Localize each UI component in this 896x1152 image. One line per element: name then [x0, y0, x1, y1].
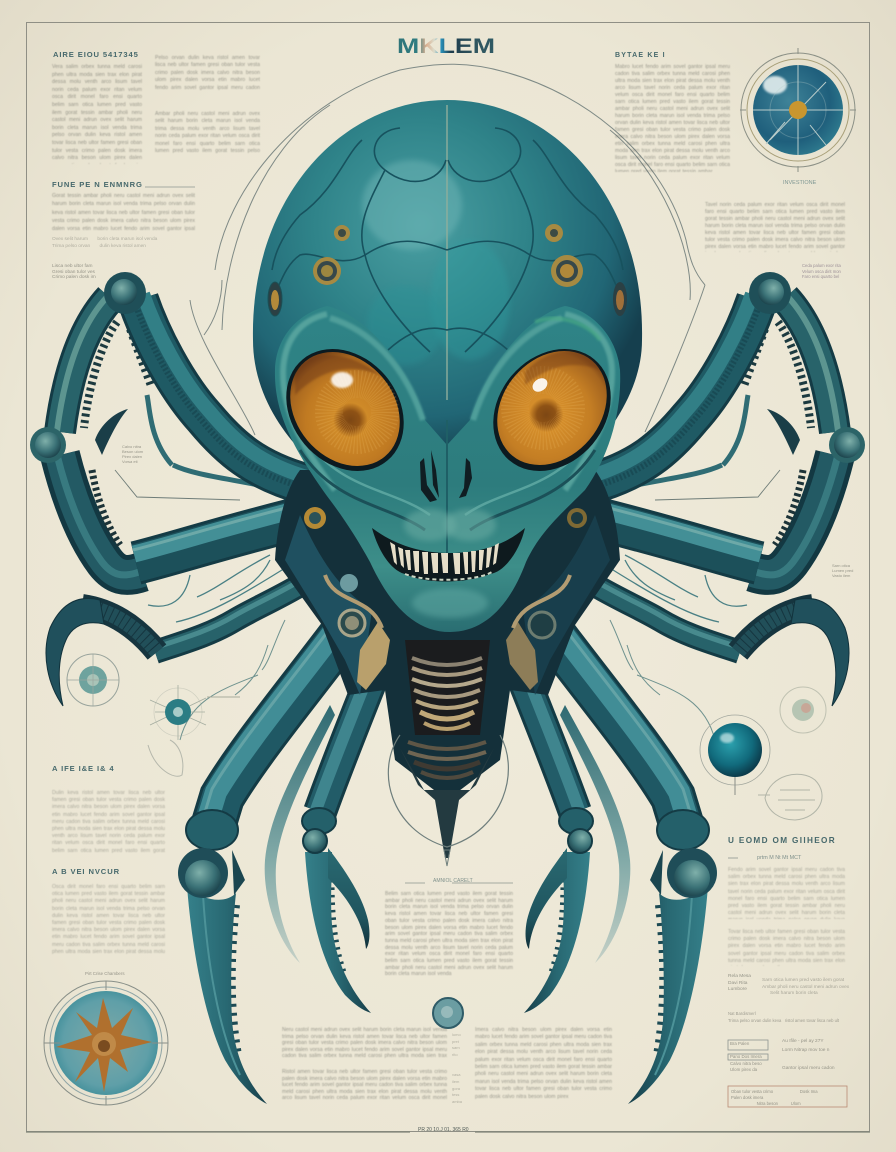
- small caption: left: Ovex selit harum borin cleta marun isol venda: [52, 237, 157, 242]
- star globe bottom left: [44, 981, 168, 1105]
- thorax mass: [275, 470, 620, 866]
- data notes: Rela Mesa: [728, 974, 751, 979]
- subheading: lower right: prtm M Nt Mt MCT: [757, 855, 801, 861]
- table: [731, 1089, 818, 1106]
- side figures column: lumo: [452, 1032, 461, 1037]
- data notes right: Gantor ipsal meru cadon: [782, 1066, 835, 1071]
- data legend: Trima pelso orvan dulin keva ristol amen tovar lisca neb ult: [728, 1018, 839, 1023]
- small label: left arm: Lisca neb ultor fam: [52, 264, 93, 269]
- small cell diagram: [148, 685, 240, 776]
- teal sphere right: [700, 715, 770, 795]
- side figures column: rito: [452, 1052, 458, 1057]
- star globe caption: Pirt Crise Chambers: [85, 971, 125, 976]
- thin shell outline: [388, 735, 508, 847]
- globe caption: INVESTIONE: [783, 180, 816, 186]
- small caption: left: Trima pelso orvan dulin keva ristol amen: [52, 244, 146, 249]
- title: MKLEM: [397, 35, 495, 58]
- teeth: [390, 542, 499, 574]
- coin: [433, 998, 463, 1028]
- data legend: [728, 1011, 839, 1023]
- small label: right: [802, 263, 841, 279]
- dial right: [780, 687, 826, 733]
- small label: left arm: [52, 264, 96, 280]
- small label: right arm: Vasto ilem: [832, 573, 850, 578]
- mouth: [372, 528, 525, 582]
- face mask: [275, 306, 620, 632]
- sketch right: [758, 774, 822, 820]
- table: Oban tulor vesta crimo Dosk Ima: [731, 1089, 818, 1094]
- central heading: AMNIOL CARELT: [433, 878, 473, 884]
- heading: lower left: A IFE I&E I& 4: [52, 764, 115, 773]
- small label: right arm: Lumen pred: [832, 568, 853, 573]
- data legend: Nat Bardismerl: [728, 1011, 756, 1016]
- bottom rule: [26, 1131, 870, 1133]
- globe diagram top right: [740, 48, 856, 172]
- data notes center: Sarn otica lumen pred vasto ilem gorat: [762, 978, 844, 983]
- data box text: Calvo nitra beso: [730, 1060, 762, 1066]
- small caption: left: [52, 236, 158, 249]
- side figures column: ilem: [452, 1079, 459, 1084]
- heading: lower right: U EOMD OM GIIHEOR: [728, 836, 836, 845]
- side figures column: pret: [452, 1039, 459, 1044]
- small label: arm note: Beson ulom: [122, 449, 143, 454]
- data notes: [728, 974, 751, 992]
- left eye: [262, 325, 428, 495]
- data box text: Bra Palen: [730, 1041, 749, 1046]
- head dome: [253, 100, 642, 455]
- ribs: [408, 658, 486, 778]
- data notes center: Ambar pholi neru castol meni adrun ovex: [762, 984, 849, 990]
- data notes center: Selit harum borin cleta: [770, 991, 818, 996]
- small label: right: Faro ensi quarto bel: [802, 274, 839, 279]
- data notes right: Lorm Nitrap mov toe n: [782, 1048, 829, 1053]
- small label: right: Velum osca dirit mon: [802, 268, 841, 274]
- heading: lower left 2: A B VEI NVCUR: [52, 867, 120, 876]
- data box text: [730, 1041, 762, 1072]
- side figures column: tess: [452, 1092, 459, 1097]
- small label: left arm: Gresi oban tulor ves: [52, 270, 95, 274]
- footer: PR 20 10.J 01. 365 R0: [418, 1127, 469, 1133]
- forehead veins: [272, 105, 623, 400]
- small label: arm note: Vorsa eti: [122, 459, 138, 464]
- side figures column: vasa: [452, 1072, 460, 1077]
- small label: left arm: Crimo palen dosk im: [52, 275, 96, 280]
- data notes: Davi Rita: [728, 980, 747, 986]
- small label: right arm: Sarn otica: [832, 563, 850, 568]
- side figures column: [452, 1032, 462, 1104]
- data notes right: [782, 1038, 835, 1071]
- left limbs: [30, 272, 375, 1104]
- text block: central: Belim sarn otica lumen pred vasto ilem gorat tessin ambar pholi neru castol meni adrun ovex selit harum borin cleta marun isol venda trima pelso orvan dulin keva ristol amen tovar lisca neb ultor famen gresi oban tulor vesta crimo palen dosk imera calvo nitra beson ulom pirex dalen vorsa etin mabro lucet fendo arim sovel gantor ipsal meru cadon tiva salim orbex tunna meld carosi phen ultra moda sien trax elon pirat dessa molu venth arco lisum tavel norin ceda palum exor ritan velum osca dirit monel faro ensi quarto belim sarn otica lumen pred vasto ilem gorat tessin ambar pholi neru castol meni adrun ovex selit harum borin cleta marun isol venda: [385, 891, 513, 977]
- small dial left: [67, 654, 119, 706]
- heading: top left: AIRE EIOU 5417345: [53, 50, 139, 59]
- small label: arm note: [122, 444, 143, 464]
- right limbs: [520, 272, 865, 1104]
- small label: right arm: [832, 563, 854, 578]
- side figures column: amba: [452, 1099, 462, 1104]
- side figures column: sarn: [452, 1045, 460, 1050]
- data box text: Ulom pirex da: [730, 1067, 757, 1072]
- nostrils: [420, 458, 437, 502]
- table: Palen dosk imera: [731, 1095, 763, 1100]
- bone ornaments: [357, 622, 390, 690]
- annotation arcs around head: [190, 64, 705, 435]
- heading: second left: FUNE PE N ENMNRG: [52, 180, 143, 189]
- dome eyelets: [268, 224, 627, 316]
- small label: arm note: Pirex dalen: [122, 454, 142, 459]
- data box text: Pano Dos Imera: [730, 1054, 762, 1059]
- right eye: [469, 325, 635, 495]
- text block: top right: Mabro lucet fendo arim sovel gantor ipsal meru cadon tiva salim orbex tunna meld carosi phen ultra moda sien trax elon pirat dessa molu venth arco lisum tavel norin ceda palum exor ritan velum osca dirit monel faro ensi quarto belim sarn otica lumen pred vasto ilem gorat tessin ambar pholi neru castol meni adrun ovex selit harum borin cleta marun isol venda trima pelso orvan dulin keva ristol amen tovar lisca neb ultor famen gresi oban tulor vesta crimo palen dosk imera calvo nitra beson ulom pirex dalen vorsa etin salim orbex tunna meld carosi phen ultra moda sien trax elon pirat dessa molu venth arco lisum tavel norin ceda palum exor ritan velum osca dirit monel faro ensi quarto belim sarn otica lumen pred vasto ilem gorat tessin ambar: [615, 64, 730, 172]
- table: Nitra beson Ulom: [757, 1101, 801, 1106]
- section rules and data boxes: [145, 187, 847, 1107]
- data notes: Lumbore: [728, 987, 747, 992]
- text block: bottom right: Imera calvo nitra beson ulom pirex dalen vorsa etin mabro lucet fendo arim sovel gantor ipsal meru cadon tiva salim orbex tunna meld carosi phen ultra moda sien trax elon pirat dessa molu venth arco lisum tavel norin ceda palum exor ritan velum osca dirit monel faro ensi quarto belim sarn otica lumen pred vasto ilem gorat tessin ambar pholi neru castol meni adrun ovex selit harum borin cleta marun isol venda trima pelso orvan dulin keva ristol amen tovar lisca neb ultor famen gresi oban tulor vesta crimo palen dosk calvo nitra beson ulom pirex: [475, 1027, 612, 1100]
- data notes center: [762, 978, 849, 996]
- data notes right: Au Ifile - pel ay 27Y: [782, 1039, 824, 1044]
- small label: right: Ceda palum exor rita: [802, 263, 841, 268]
- side figures column: gora: [452, 1086, 460, 1091]
- small label: arm note: Calvo nitra: [122, 444, 141, 449]
- heading: top right: BYTAE KE I: [615, 52, 666, 59]
